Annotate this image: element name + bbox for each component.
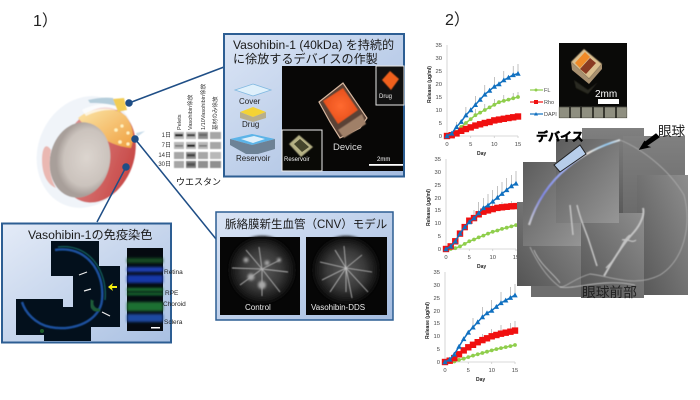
error bars: [473, 284, 515, 340]
device photo: Device: [333, 142, 362, 153]
y ticks: [434, 270, 440, 366]
device close-up photo: [559, 43, 627, 118]
y ticks: 10: [436, 108, 442, 114]
blot time labels: 7日: [162, 142, 171, 149]
y ticks: [436, 43, 442, 140]
x ticks: 0: [444, 255, 448, 261]
eye anatomy illustration: [20, 81, 152, 223]
y ticks: 35: [434, 270, 440, 276]
y ticks: 25: [435, 183, 441, 189]
x ticks: 0: [445, 142, 449, 148]
chart legend: Rho: [544, 100, 554, 106]
x ticks: 10: [488, 368, 495, 374]
axes: [445, 272, 515, 364]
y ticks: 30: [436, 56, 442, 62]
control fundus image: Control: [245, 303, 271, 312]
vasohibin fundus image: Vasohibin-DDS: [311, 303, 365, 312]
blot time labels: 30日: [158, 161, 171, 168]
scan tiles: [517, 128, 688, 298]
panel: immunostaining: [2, 224, 186, 342]
y ticks: 5: [438, 234, 441, 240]
chart: release top: Day: [477, 151, 486, 157]
chart: release middle: Day: [477, 264, 486, 270]
device layer diagram: Drug: [242, 120, 259, 129]
blot lane labels: Vasohibin徐放: [186, 94, 194, 130]
retinal layer labels: Retina: [164, 269, 183, 276]
series: [446, 225, 516, 249]
blot lane labels: [177, 83, 219, 130]
y ticks: 20: [435, 196, 441, 202]
retinal layer labels: Choroid: [163, 301, 186, 308]
anterior label: 眼球前部: [582, 284, 637, 300]
x ticks: 15: [515, 142, 521, 148]
coloured arc: [529, 140, 620, 225]
control fundus image: [220, 236, 300, 315]
chart: release top: [427, 43, 521, 157]
device marker: [554, 145, 586, 172]
y ticks: 30: [434, 283, 440, 289]
y ticks: 0: [439, 134, 442, 140]
blot lane labels: 基材のみ徐放: [211, 96, 219, 130]
device layer diagram: Reservoir: [236, 154, 271, 163]
y ticks: [435, 157, 441, 253]
y ticks: 20: [434, 309, 440, 315]
y ticks: 5: [437, 347, 440, 353]
chart: release middle: [426, 157, 519, 270]
panel: CNV model: [216, 212, 393, 320]
vasohibin fundus image: [306, 236, 387, 315]
y ticks: 5: [439, 121, 442, 127]
eyeball arrow: [640, 134, 659, 149]
retinal layer labels: RPE: [165, 290, 179, 297]
error bars: [474, 171, 516, 218]
x ticks: 5: [468, 255, 471, 261]
y ticks: 15: [435, 208, 441, 214]
blot time labels: [158, 132, 171, 168]
y ticks: 10: [435, 221, 441, 227]
y ticks: 25: [434, 296, 440, 302]
heading: section 2: 2）: [445, 11, 470, 29]
y ticks: 10: [434, 334, 440, 340]
y ticks: 35: [435, 157, 441, 163]
chart legend: DAPI: [544, 112, 557, 118]
drug inset: Drug: [379, 94, 392, 100]
blot bands: [174, 132, 221, 168]
device photo: [282, 66, 404, 171]
retinal layer labels: [163, 269, 186, 326]
blot time labels: 14日: [158, 152, 171, 159]
device close-up photo: 2mm: [595, 89, 617, 100]
y ticks: 25: [436, 69, 442, 75]
chart: release bottom: [425, 270, 518, 383]
x ticks: 5: [469, 142, 472, 148]
x ticks: [444, 255, 519, 261]
device photo: 2mm: [377, 157, 390, 163]
anterior tissue: [534, 205, 643, 287]
y ticks: 15: [436, 95, 442, 101]
x ticks: 10: [489, 255, 496, 261]
western blot: [158, 83, 221, 187]
y ticks: 20: [436, 82, 442, 88]
x ticks: [445, 142, 521, 148]
retinal layer labels: Sclera: [164, 319, 183, 326]
series: [447, 97, 518, 136]
eyeball label: 眼球: [658, 124, 686, 139]
x ticks: 15: [512, 368, 518, 374]
chart legend: FL: [544, 88, 550, 94]
chart: release bottom: Day: [476, 377, 485, 383]
y ticks: 15: [434, 321, 440, 327]
axis titles: Release (μg/ml): [427, 66, 433, 103]
y ticks: 35: [436, 43, 442, 49]
axes: [447, 45, 518, 138]
axes: [446, 159, 516, 251]
yellow arrow: [108, 283, 117, 291]
x ticks: 5: [467, 368, 470, 374]
y ticks: 0: [438, 247, 441, 253]
blot time labels: 1日: [162, 132, 171, 139]
chart legend: [530, 88, 557, 118]
y ticks: 30: [435, 170, 441, 176]
axis titles: Release (μg/ml): [426, 189, 432, 226]
eye contour: [530, 140, 687, 287]
device label: デバイス: [536, 129, 584, 144]
x ticks: [443, 368, 518, 374]
device heading: Vasohibin-1 (40kDa) を持続的: [233, 37, 394, 52]
blot lane labels: 1/10Vasohibin徐放: [199, 83, 207, 130]
device layer diagram: [230, 84, 275, 163]
x ticks: 15: [513, 255, 519, 261]
error bars: [456, 64, 518, 127]
blot lane labels: Pelets: [177, 114, 183, 130]
immunostaining heading: Vasohibin-1の免疫染色: [28, 227, 152, 242]
white arrows: [79, 272, 110, 316]
CNV heading: 脈絡膜新生血管（CNV）モデル: [225, 217, 387, 231]
retinal layers image: [127, 248, 163, 331]
series: [445, 345, 515, 362]
axis titles: Release (μg/ml): [425, 302, 431, 339]
eye cross-section scan: [517, 124, 688, 300]
x ticks: 0: [443, 368, 447, 374]
connector lines from eye to panels: [97, 67, 224, 239]
stained section image: [16, 241, 120, 341]
y ticks: 0: [437, 360, 440, 366]
device layer diagram: Cover: [239, 97, 261, 106]
reservoir inset: Reservoir: [284, 157, 310, 163]
heading: section 1: 1）: [33, 12, 58, 30]
panel: device fabrication: [224, 34, 404, 176]
x ticks: 10: [491, 142, 498, 148]
blot caption: ウエスタン: [176, 177, 221, 187]
device heading: に徐放するデバイスの作製: [233, 51, 378, 66]
